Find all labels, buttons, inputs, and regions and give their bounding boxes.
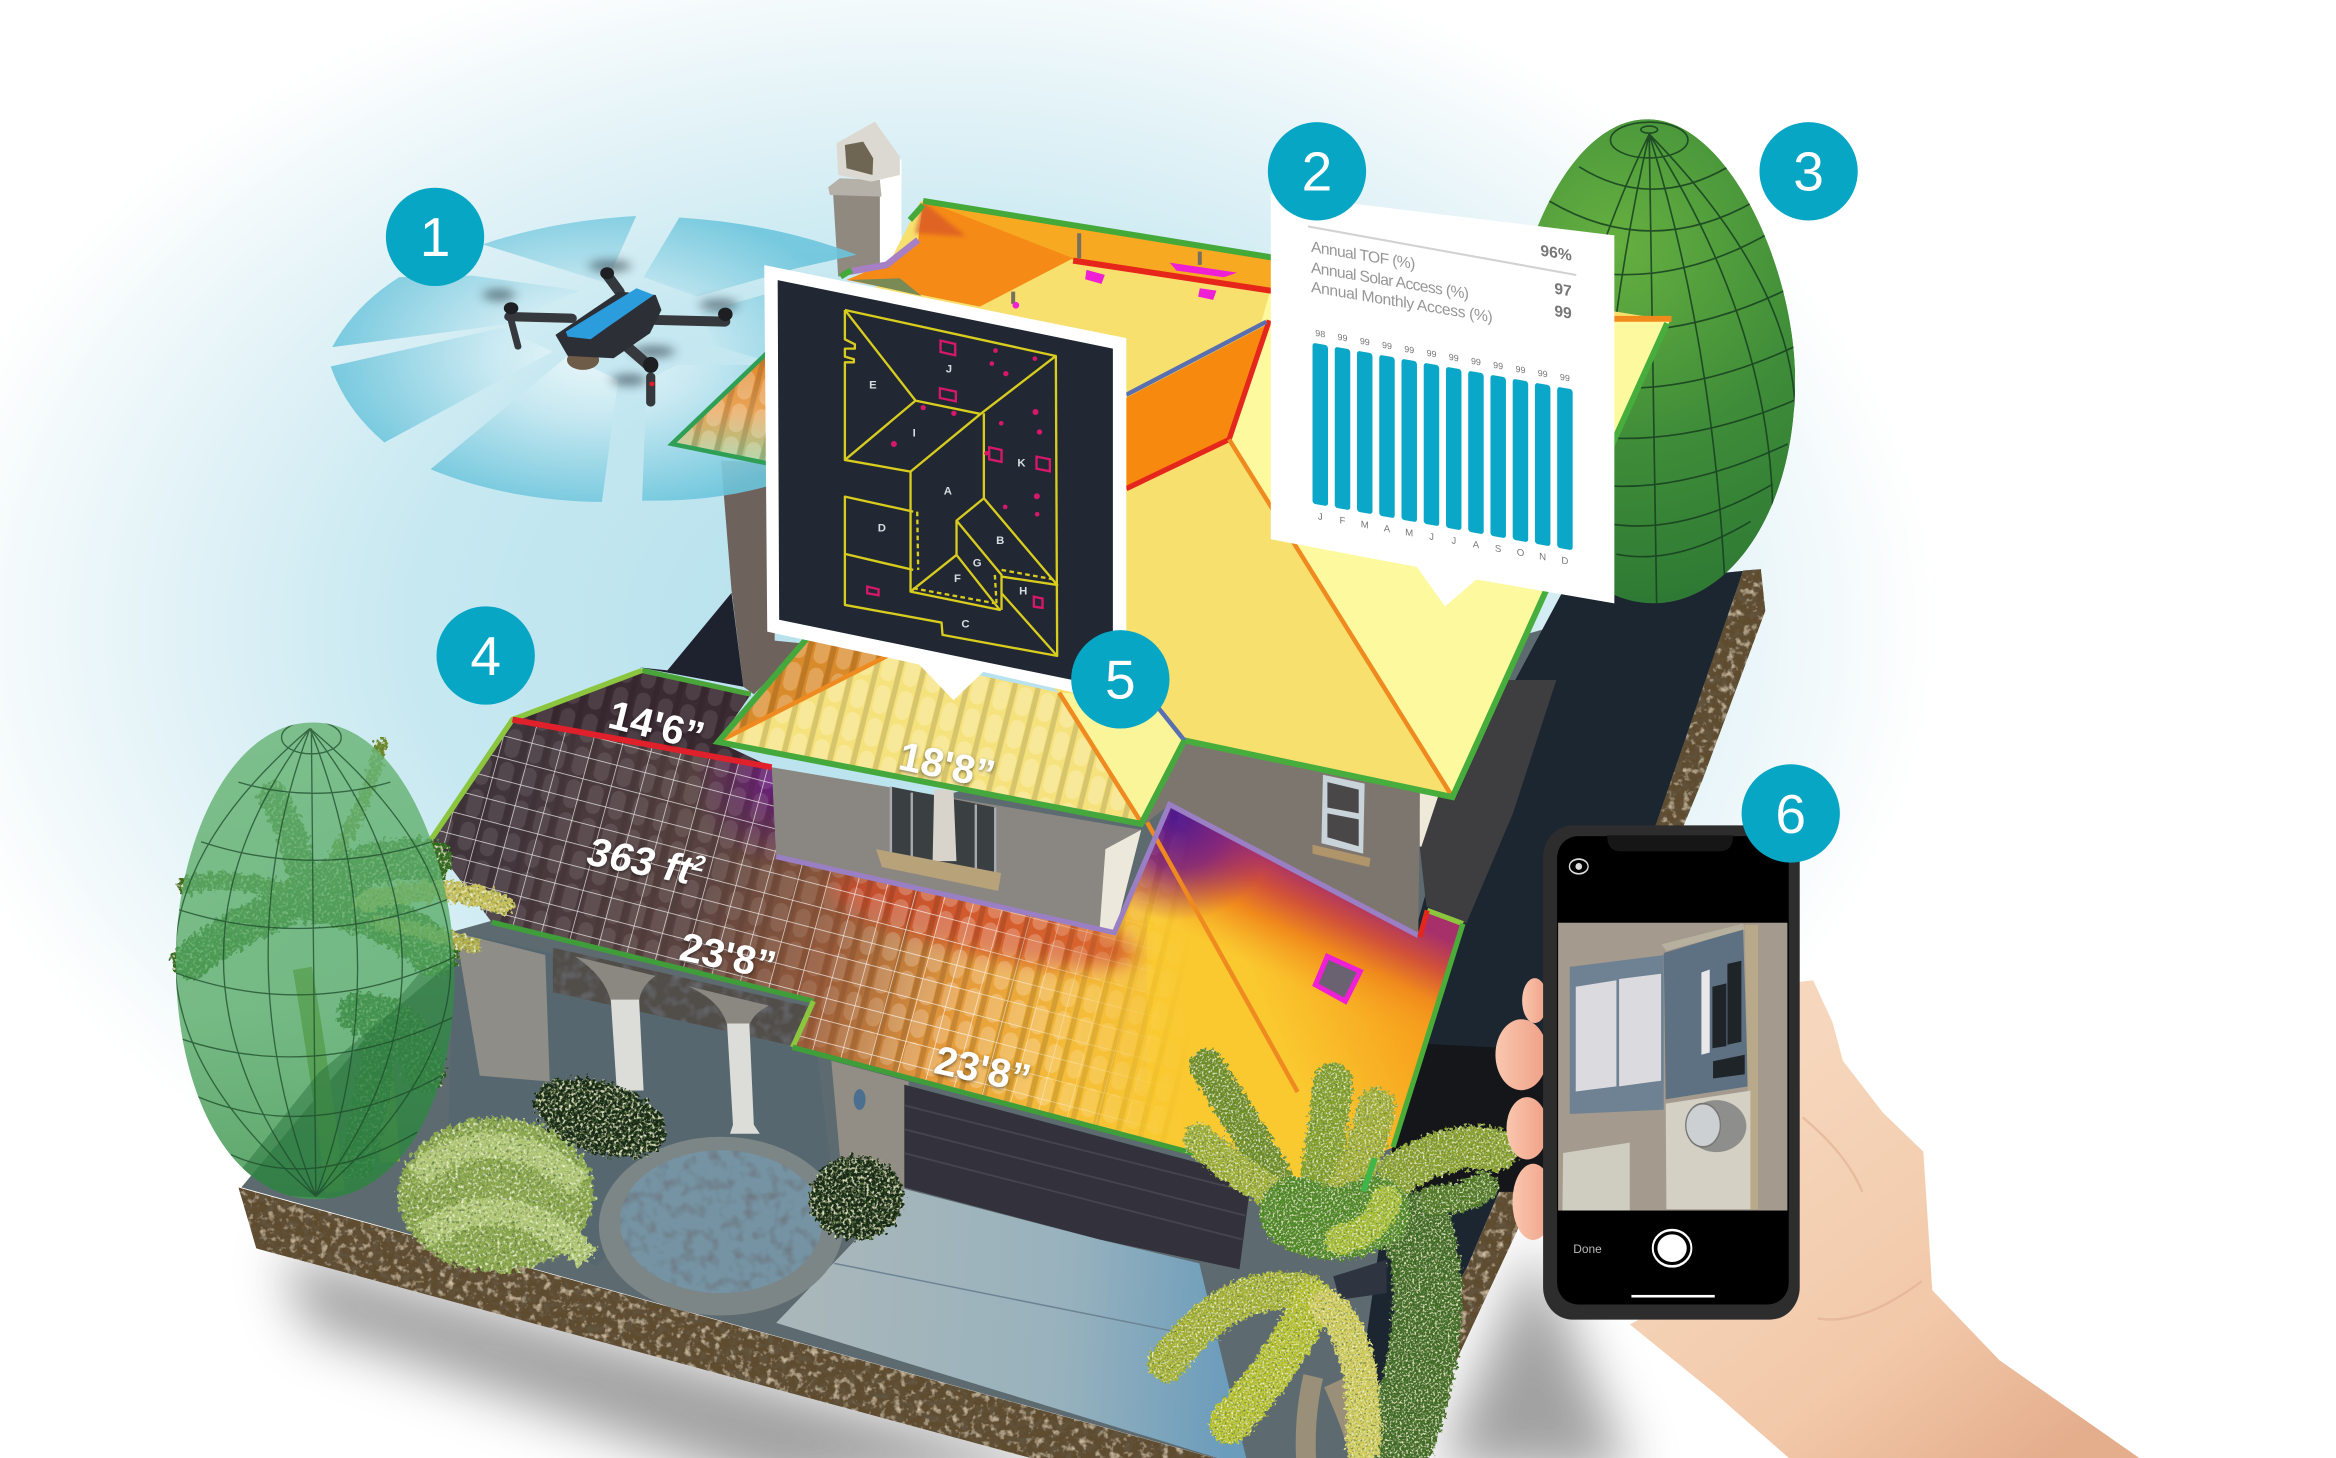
phone body [1543,825,1800,1320]
dormer window [876,787,1001,891]
plan drawing [845,310,1057,656]
upper palm fronds [1200,1066,1387,1240]
label 23'8" upper: 23'8” [676,924,780,988]
top planes in roof-detail coordinates [841,200,1283,309]
home indicator [1631,1295,1715,1298]
garage wall [831,1061,909,1192]
label 363 ft2: 363 ft [584,829,696,893]
bar values: 99 [1449,352,1459,363]
month labels: N [1539,551,1546,563]
roof edge lines [431,670,1463,1184]
bar chart [1313,327,1573,568]
stone wall [553,948,812,1050]
badge 1 [386,188,484,286]
badge 4 [437,606,535,705]
month labels: M [1405,527,1413,540]
panel: solar access chart callout [1271,194,1614,606]
month labels: D [1561,555,1568,567]
plan section letters: H [1019,586,1027,598]
dormer tiles [718,638,1141,822]
palm dark shadow [1333,1260,1387,1300]
left solar access egg [164,721,462,1207]
big palm trees [1167,1066,1497,1458]
light plane [1059,693,1184,822]
bar values: 99 [1427,348,1437,359]
plan section letters: B [996,535,1004,547]
hand holding phone [1495,978,2153,1458]
drone arms [510,275,725,403]
porch pillar [456,933,550,1082]
dormer roof [718,638,1184,824]
label 14'6": 14'6” [604,692,709,759]
window dormer wall [772,767,1141,936]
orange plane beside plan panel [1126,325,1266,489]
rotor blur [483,260,738,386]
chimney [828,122,902,277]
chart statistics [1311,239,1572,326]
month labels: J [1451,535,1456,547]
badge 2 [1268,122,1366,220]
camera photo [1558,923,1787,1211]
electric meter [1686,1100,1746,1152]
walls of main house [1141,680,1556,1192]
badge 3: 3 [1793,141,1824,203]
heat overlays [417,656,1467,1192]
drone scan sweep [331,216,857,502]
garage [831,1061,1251,1269]
open breaker door [1570,955,1664,1114]
purple ridge line [776,804,1418,936]
label 363 ft2: 2 [690,850,708,877]
lower box [1562,1143,1630,1211]
badge 5: 5 [1105,649,1136,711]
left back roof [672,346,775,465]
month labels: J [1429,531,1434,543]
measurement grid [440,727,1165,1140]
red ridge [1073,261,1283,293]
chimney opening [845,142,873,175]
dark side yard [1348,569,1761,1458]
phone [1543,825,1800,1320]
roof edges [1184,323,1667,797]
drone body [555,292,661,358]
pink obstructions [867,341,1050,608]
yellow roof outlines [845,310,1057,656]
amber top strip [923,200,1283,293]
plan section letters: E [869,379,877,391]
slab: soil block and ground [238,569,1765,1458]
middle wall [1141,740,1420,936]
month labels: A [1384,523,1391,535]
breaker panel [1664,929,1748,1099]
ground shadow under slab [283,1244,1631,1458]
chart statistics: Annual TOF (%) [1311,239,1415,273]
month labels: F [1339,515,1345,527]
upstairs window [1313,775,1371,867]
white callout with pointer [1271,194,1614,606]
chimney body [833,195,880,277]
month labels: A [1473,539,1480,551]
roof tiles [435,673,1164,1140]
chart statistics: 96% [1540,243,1572,265]
drone blue shell [566,288,654,339]
dark plan background [778,280,1113,688]
meter box [1666,1091,1750,1209]
orange plane [847,200,1073,307]
roof vents [1012,233,1237,309]
palm trunks [1306,1376,1363,1458]
plan section letters [869,363,1027,631]
left palm fronds [186,745,504,1162]
chart statistics: Annual Solar Access (%) [1311,260,1469,303]
plan section letters: C [961,619,970,631]
month labels: M [1361,519,1369,532]
drone tail light [649,382,655,386]
month labels: O [1517,547,1525,560]
fingers [1495,978,1554,1240]
green corner [841,205,923,277]
dark recess behind wall [639,593,743,687]
pink vents [891,348,1042,517]
drone motors [504,267,733,373]
chart statistics: 99 [1554,303,1572,323]
badge 1: 1 [420,206,450,268]
ridge lines [1126,320,1269,489]
bar values: 99 [1382,340,1392,351]
plan section letters: G [973,558,982,570]
plan section letters: I [913,428,916,440]
lower palm fronds [1167,1290,1363,1446]
plan section letters: K [1017,458,1026,470]
bar values: 99 [1471,356,1481,367]
drone [483,260,738,403]
chimney collar [828,178,882,197]
left house wall [639,460,804,694]
label 23'8" lower: 23'8” [931,1037,1035,1102]
chimney cap [837,122,900,182]
bar values: 99 [1337,332,1347,343]
bar values: 99 [1560,372,1570,383]
month labels: J [1318,511,1323,523]
light green bush [398,1117,594,1272]
side wall [1420,680,1556,923]
bar values: 99 [1493,360,1503,371]
magenta obstruction marker [1315,956,1360,1001]
roof measurement labels [584,692,1035,1102]
bar values: 99 [1360,336,1370,347]
flash icon [1569,859,1588,874]
badge 6: 6 [1775,783,1806,845]
orange tiled plane [718,638,888,742]
notch [1607,835,1733,851]
plan section letters: D [878,523,886,535]
done label: Done [1573,1242,1602,1256]
divider [1308,226,1576,275]
roof flashing and trim [1661,924,1745,951]
arch capitals [575,956,656,1001]
olive shadow [850,278,922,296]
window sill [1313,845,1371,867]
soil front face [238,1187,1248,1458]
bar values [1315,328,1570,383]
stone wall and porch [447,931,834,1266]
sunlit slit [1420,793,1438,847]
chart statistics: Annual Monthly Access (%) [1311,279,1493,326]
main upper roof [775,200,1672,797]
white frame with pointer [764,265,1126,705]
month labels [1318,511,1568,567]
bar values: 99 [1404,344,1414,355]
roof hip line [1147,822,1298,1092]
right dark fronds [1393,1147,1497,1458]
egg shadow wedge [164,721,462,1207]
porch floor [447,931,834,1266]
stray roof segment [1363,1158,1375,1191]
chart statistics: 97 [1554,281,1572,300]
badge 6 [1742,764,1840,863]
plan section letters: F [954,573,961,585]
drone camera [567,350,599,370]
red measured edge [512,720,772,767]
lower roof with heat map [417,656,1467,1192]
plan section letters: A [944,485,952,497]
right solar access egg [1538,119,1796,604]
left palm tree [186,745,504,1192]
left palm trunks [302,968,390,1192]
hot corner [915,202,967,237]
fence [1386,1043,1549,1192]
badge 2: 2 [1302,141,1332,203]
bar values: 99 [1516,364,1525,376]
columns [611,1000,644,1091]
green top edge [923,201,1283,259]
dark shrubs [524,1062,904,1240]
light right plane [1229,293,1670,797]
badge 4: 4 [470,625,501,687]
badge 3 [1759,122,1858,220]
panel: roof plan callout [764,265,1126,705]
plan section letters: J [946,363,952,375]
paved circle [599,1137,843,1315]
phone screen [1557,836,1789,1304]
thumb crease [1803,1117,1922,1320]
label 18'8": 18'8” [895,734,999,798]
shutter button [1653,1230,1691,1266]
driveway [776,1189,1248,1458]
badge 5 [1071,630,1169,729]
soil right face [1363,569,1765,1458]
lamp [854,1089,866,1110]
white side of chimney [880,150,902,273]
slab top ground [241,569,1761,1458]
garage door [904,1085,1251,1269]
dormer lines [718,656,888,742]
bar values: 98 [1315,328,1325,339]
palm and wrist [1630,980,2153,1458]
month labels: S [1495,543,1502,555]
bar values: 99 [1538,368,1548,379]
purple flashing [850,240,918,272]
roof base [775,201,1670,797]
